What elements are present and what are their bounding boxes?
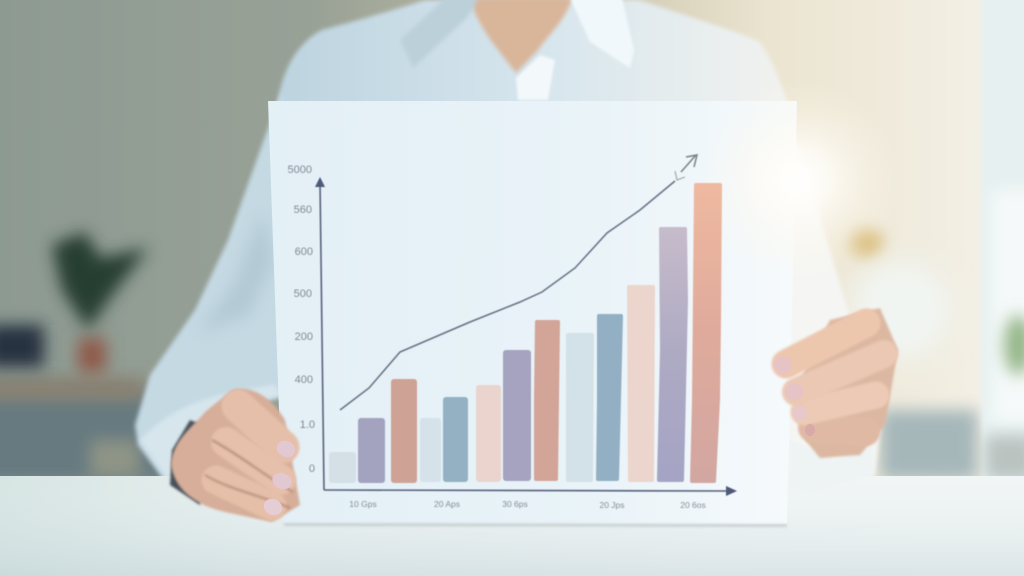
paper sheet xyxy=(268,101,797,527)
y axis labels: 560 xyxy=(294,204,312,216)
x axis labels: 10 Gps xyxy=(349,499,377,509)
shirt torso xyxy=(270,0,800,300)
y axis labels: 5000 xyxy=(288,164,312,176)
placket xyxy=(516,55,555,100)
left finger 3 xyxy=(216,480,272,506)
bar 11 xyxy=(629,287,653,480)
bar 3 xyxy=(391,379,417,483)
neck xyxy=(470,0,572,73)
right palm xyxy=(800,308,898,458)
bar 2 xyxy=(358,418,385,483)
right finger 2 xyxy=(796,354,884,392)
right nail 3 xyxy=(792,406,808,420)
bar 4 xyxy=(420,418,441,482)
bar 6 xyxy=(476,385,501,482)
right nail 1 xyxy=(774,356,792,374)
x axis labels: 20 Jps xyxy=(599,500,625,510)
right cuff over the table edge xyxy=(790,440,873,492)
left sleeve xyxy=(135,90,290,486)
left nail 1 xyxy=(274,438,298,460)
y axis labels: 200 xyxy=(295,331,313,343)
bar 7 xyxy=(503,350,531,481)
y axis labels: 500 xyxy=(294,288,312,300)
x axis labels: 20 6os xyxy=(680,500,706,510)
bar 1 xyxy=(329,452,356,483)
blurred room objects on the left xyxy=(0,232,190,482)
left sleeve fold shading xyxy=(140,385,280,482)
left finger creases xyxy=(205,440,293,508)
y axis labels: 0 xyxy=(309,463,315,475)
right finger 1 xyxy=(786,323,866,364)
left nail 2 xyxy=(270,470,294,492)
y axis labels: 600 xyxy=(295,246,313,258)
trend line with arrow xyxy=(340,155,697,410)
x axis labels xyxy=(349,499,706,510)
x axis labels: 30 6ps xyxy=(502,499,528,509)
left finger 1 xyxy=(238,406,283,447)
x axis labels: 20 Aps xyxy=(434,499,460,509)
bar chart xyxy=(329,185,720,483)
bar 10 xyxy=(598,316,621,479)
y axis labels: 1.0 xyxy=(300,419,315,431)
bar 8 xyxy=(536,322,558,479)
right nail 2 xyxy=(785,384,803,400)
right hand xyxy=(774,308,898,458)
bar 5 xyxy=(443,397,468,482)
right finger 3 xyxy=(804,395,876,412)
x axis with arrow xyxy=(324,486,737,496)
right collar xyxy=(570,0,634,68)
y axis labels: 400 xyxy=(295,374,313,386)
blurred room objects on the right xyxy=(849,0,1024,480)
right sleeve xyxy=(785,120,880,492)
light flare xyxy=(700,80,900,280)
left collar xyxy=(400,0,478,68)
left nail 3 xyxy=(261,496,285,518)
bar 12 xyxy=(659,229,686,480)
left cuff xyxy=(170,420,215,505)
bar 13 xyxy=(692,185,720,481)
left sleeve fold shadow xyxy=(196,210,275,335)
left hand xyxy=(170,389,300,522)
right finger 4 xyxy=(812,428,866,432)
left palm xyxy=(171,389,300,522)
y axis labels xyxy=(288,164,315,475)
left finger 2 xyxy=(226,442,281,480)
y axis with arrow xyxy=(315,177,325,490)
person: shirt and neck xyxy=(135,0,880,492)
right nail 4 xyxy=(805,424,815,436)
table top xyxy=(0,476,1024,576)
bar 9 xyxy=(568,335,592,480)
